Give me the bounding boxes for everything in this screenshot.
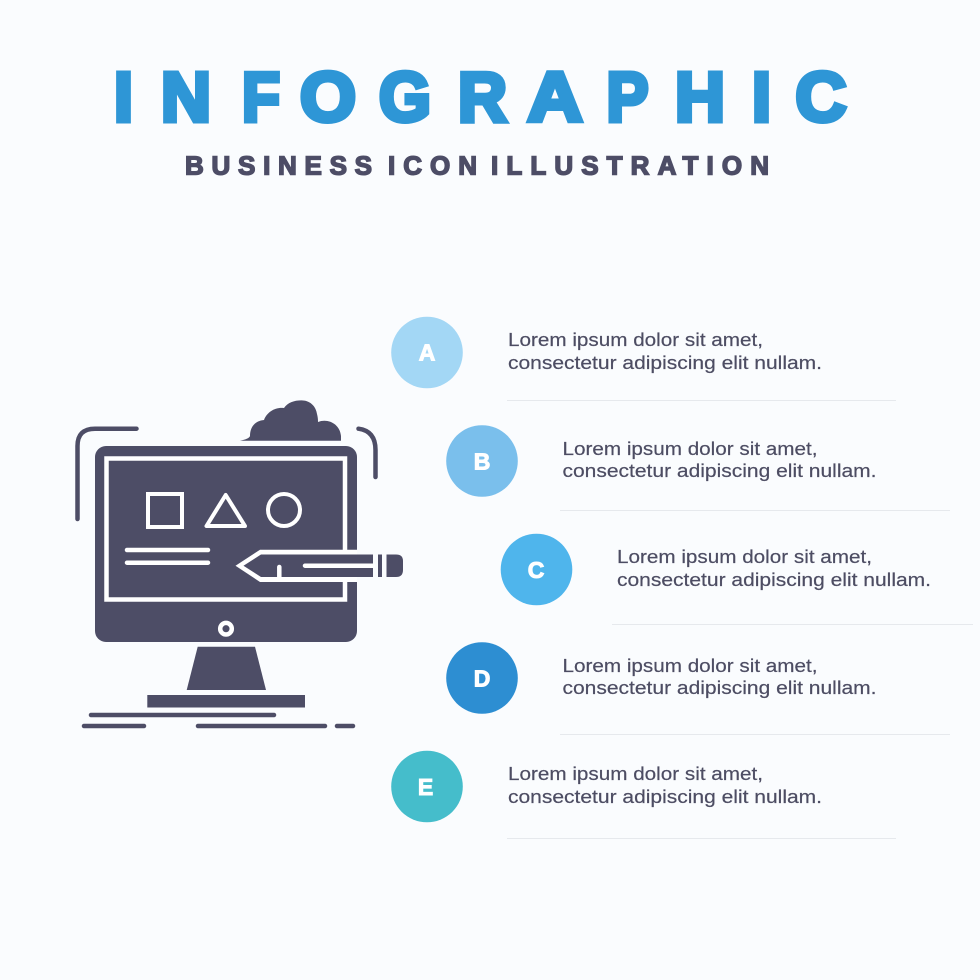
title bbox=[114, 58, 846, 136]
title: I bbox=[114, 58, 133, 136]
step A: Lorem ipsum dolor sit amet, bbox=[508, 329, 763, 350]
step C bbox=[501, 534, 973, 625]
monitor stand bbox=[187, 647, 266, 690]
title: A bbox=[528, 58, 582, 136]
step A: consectetur adipiscing elit nullam. bbox=[508, 352, 822, 373]
monitor body bbox=[95, 446, 357, 642]
title: P bbox=[606, 58, 648, 136]
circle shape bbox=[268, 494, 300, 526]
title: C bbox=[796, 58, 846, 136]
step D: D bbox=[474, 666, 490, 692]
step B: Lorem ipsum dolor sit amet, bbox=[562, 438, 818, 459]
subtitle: ILLUSTRATION bbox=[491, 150, 769, 180]
ground lines bbox=[84, 715, 353, 726]
title: G bbox=[379, 58, 431, 136]
step A: A bbox=[419, 340, 435, 366]
step D bbox=[446, 642, 950, 735]
title: R bbox=[458, 58, 507, 136]
step B: consectetur adipiscing elit nullam. bbox=[562, 460, 876, 481]
title: I bbox=[752, 58, 771, 136]
step D: Lorem ipsum dolor sit amet, bbox=[562, 655, 818, 676]
monitor base bbox=[147, 695, 305, 708]
step C: C bbox=[528, 557, 544, 583]
triangle shape bbox=[206, 495, 245, 526]
title: H bbox=[675, 58, 725, 136]
screen frame bbox=[106, 458, 345, 600]
subtitle: BUSINESS bbox=[185, 150, 372, 180]
step E: consectetur adipiscing elit nullam. bbox=[508, 786, 822, 807]
title: F bbox=[242, 58, 280, 136]
title: N bbox=[161, 58, 211, 136]
power button bbox=[220, 623, 232, 634]
square shape bbox=[148, 494, 182, 527]
step C: consectetur adipiscing elit nullam. bbox=[617, 569, 931, 590]
step E: E bbox=[418, 774, 433, 800]
step B: B bbox=[474, 448, 490, 474]
cloud bbox=[240, 400, 341, 441]
pencil bbox=[236, 550, 403, 582]
step B bbox=[446, 425, 950, 511]
step E bbox=[391, 751, 896, 839]
title: O bbox=[300, 58, 356, 136]
subtitle: ICON bbox=[388, 150, 477, 180]
step A bbox=[391, 317, 896, 401]
step D: consectetur adipiscing elit nullam. bbox=[562, 677, 876, 698]
step E: Lorem ipsum dolor sit amet, bbox=[508, 763, 763, 784]
subtitle bbox=[185, 150, 769, 180]
left bracket bbox=[78, 429, 136, 519]
step C: Lorem ipsum dolor sit amet, bbox=[617, 546, 872, 567]
right bracket bbox=[358, 429, 376, 477]
text lines bbox=[127, 550, 208, 563]
icon: computer monitor with pencil and cloud bbox=[78, 400, 403, 726]
